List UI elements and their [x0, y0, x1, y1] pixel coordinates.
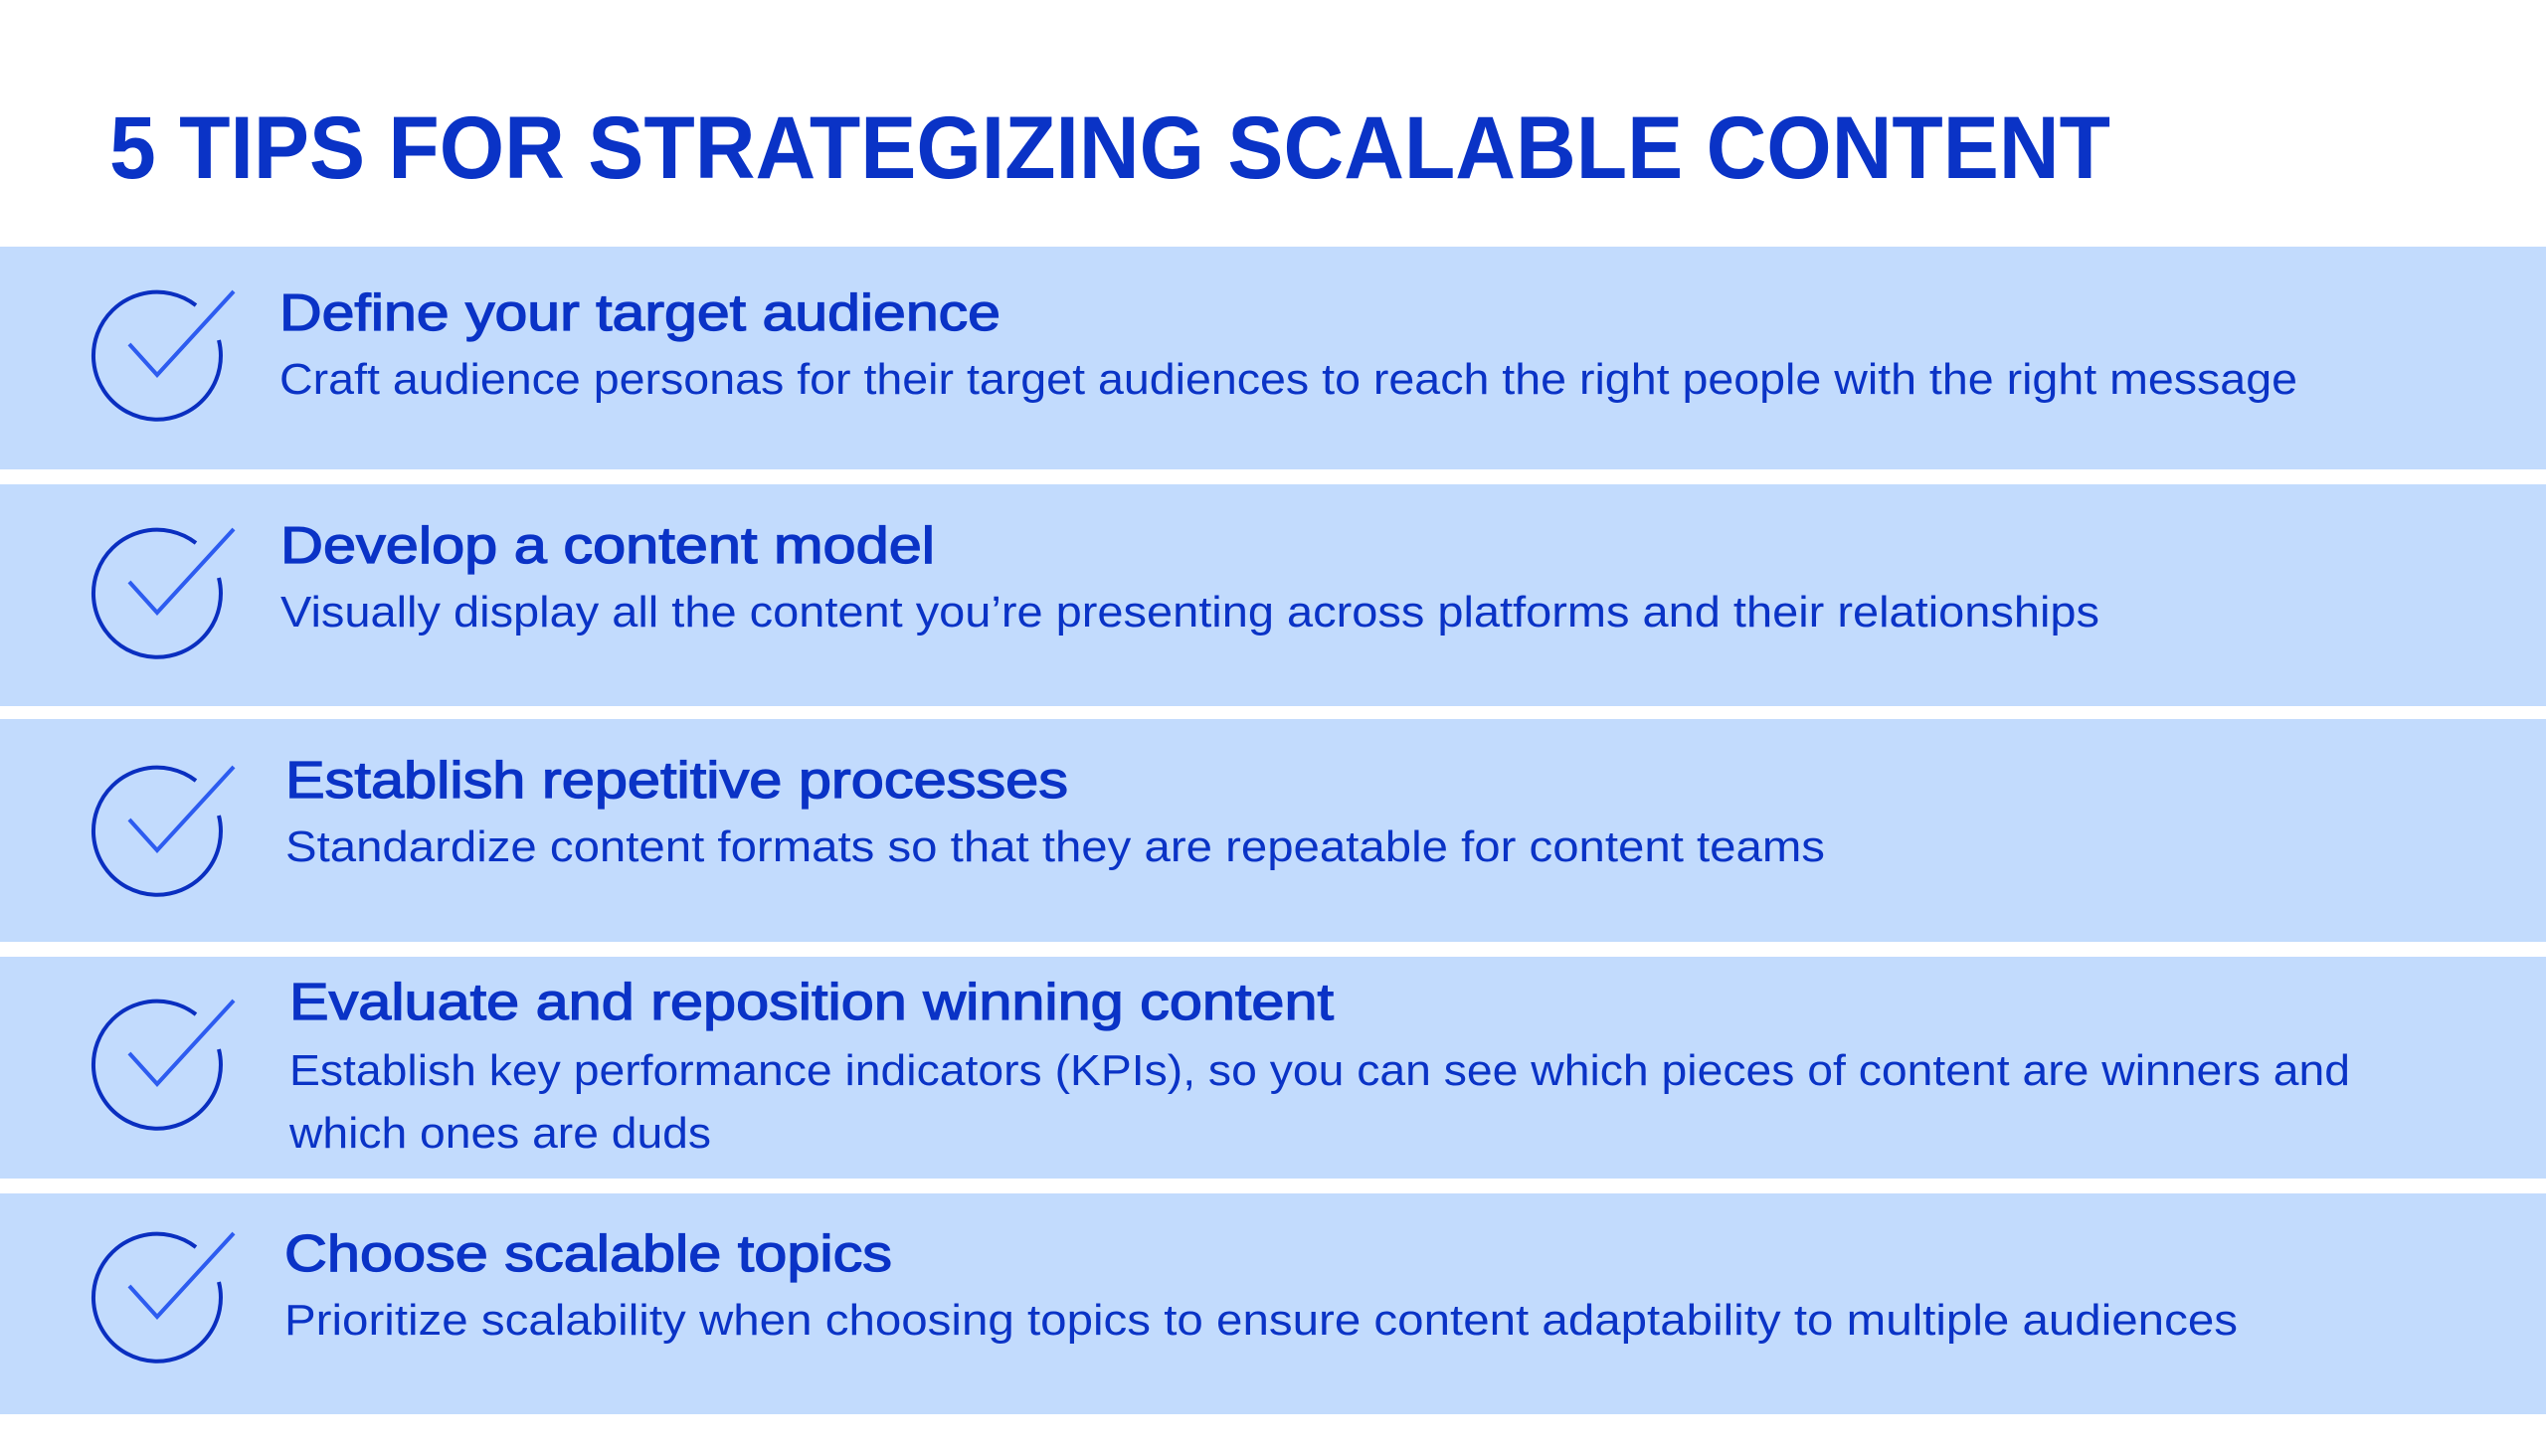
heading: tip 5: Choose scalable topics: [284, 1225, 892, 1283]
text: tip 5 description: Prioritize scalability when choosing topics to ensure content adaptability to multiple audiences: [284, 1296, 2238, 1345]
text: tip 2 description: Visually display all the content you’re presenting across platforms and their relationships: [280, 588, 2099, 637]
icon: check circle 3: [93, 767, 234, 895]
heading: tip 3: Establish repetitive processes: [285, 752, 1068, 810]
icon: check circle 5: [93, 1233, 234, 1362]
title: 5 TIPS FOR STRATEGIZING SCALABLE CONTENT: [109, 97, 2110, 197]
panel: tip 5: [0, 1193, 2546, 1414]
text: tip 1 description: Craft audience personas for their target audiences to reach the right people with the right message: [279, 355, 2297, 404]
icon: check circle 4: [93, 1001, 234, 1129]
panel: tip 3: [0, 719, 2546, 942]
text: tip 4 description: Establish key performance indicators (KPIs), so you can see which pieces of content are winners and: [289, 1046, 2350, 1095]
icon: check circle 2: [93, 529, 234, 657]
heading: tip 1: Define your target audience: [279, 284, 1000, 342]
icon: check circle 1: [93, 291, 234, 420]
panel: tip 4: [0, 957, 2546, 1179]
heading: tip 4: Evaluate and reposition winning content: [289, 974, 1335, 1031]
text: tip 4 description: which ones are duds: [288, 1109, 711, 1158]
heading: tip 2: Develop a content model: [280, 517, 935, 575]
panel: tip 1: [0, 247, 2546, 469]
panel: tip 2: [0, 484, 2546, 706]
text: tip 3 description: Standardize content formats so that they are repeatable for content teams: [285, 822, 1825, 871]
